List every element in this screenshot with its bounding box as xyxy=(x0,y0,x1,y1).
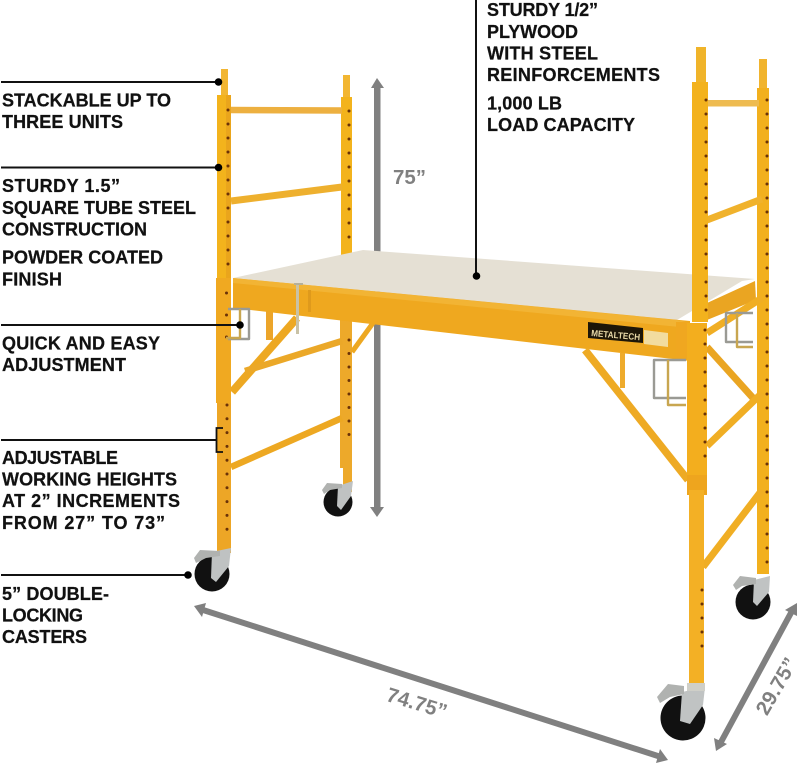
arrow: 75 inch height xyxy=(370,78,384,517)
callout: adjustable working heights: AT 2” INCREMENTS xyxy=(2,491,180,511)
left hardware handle xyxy=(226,309,249,339)
callout: plywood deck: LOAD CAPACITY xyxy=(487,115,635,135)
callout: adjustable working heights: FROM 27” TO 73” xyxy=(2,513,165,533)
label: 75 inch: 75” xyxy=(393,166,426,189)
callout: plywood deck: 1,000 LB xyxy=(487,94,562,114)
caster: right front xyxy=(657,683,706,740)
callout: stackable xyxy=(1,78,222,132)
callout: plywood deck: WITH STEEL xyxy=(487,44,598,64)
caster: right rear xyxy=(733,576,770,620)
callout: adjustable working heights: WORKING HEIGHTS xyxy=(2,470,177,490)
left scaffold frame xyxy=(216,69,373,553)
callout: square tube steel: POWDER COATED xyxy=(2,248,163,268)
callout: casters: 5” DOUBLE- xyxy=(2,584,109,604)
callout: quick adjustment xyxy=(1,321,244,375)
callout: adjustable working heights: ADJUSTABLE xyxy=(2,448,118,468)
callout: stackable: THREE UNITS xyxy=(2,112,123,132)
label: 74.75 inch: 74.75” xyxy=(384,683,450,724)
arrow: 74.75 inch length xyxy=(194,603,668,763)
front beam xyxy=(233,278,690,361)
callout: square tube steel: STURDY 1.5” xyxy=(2,176,120,196)
callout: casters xyxy=(1,571,192,647)
brand plate: MetalTech xyxy=(588,322,668,347)
platform deck xyxy=(233,250,755,320)
callout: square tube steel xyxy=(1,164,222,290)
right scaffold frame rear xyxy=(703,59,769,574)
callout: casters: CASTERS xyxy=(2,627,87,647)
callout: square tube steel: SQUARE TUBE STEEL xyxy=(2,198,196,218)
right front corner post xyxy=(585,47,708,685)
caster: left rear xyxy=(322,481,353,516)
hardware handle: right front xyxy=(654,360,686,405)
callout: square tube steel: CONSTRUCTION xyxy=(2,220,147,240)
callout: adjustable working heights xyxy=(1,428,223,533)
callout: stackable: STACKABLE UP TO xyxy=(2,90,171,110)
callout: casters: LOCKING xyxy=(2,606,83,626)
brand plate: MetalTech: METALTECH xyxy=(591,328,641,342)
callout: quick adjustment: ADJUSTMENT xyxy=(2,355,126,375)
arrow: 29.75 inch width xyxy=(714,603,797,751)
hardware handle: right rear xyxy=(726,313,753,347)
callout: plywood deck: REINFORCEMENTS xyxy=(487,65,660,85)
callout: plywood deck: STURDY 1/2” xyxy=(487,0,598,20)
callout: quick adjustment: QUICK AND EASY xyxy=(2,334,160,354)
deck clamp xyxy=(294,283,303,334)
caster: left front xyxy=(194,548,231,592)
callout: plywood deck xyxy=(473,0,660,280)
callout: plywood deck: PLYWOOD xyxy=(487,22,578,42)
callout: square tube steel: FINISH xyxy=(2,270,62,290)
